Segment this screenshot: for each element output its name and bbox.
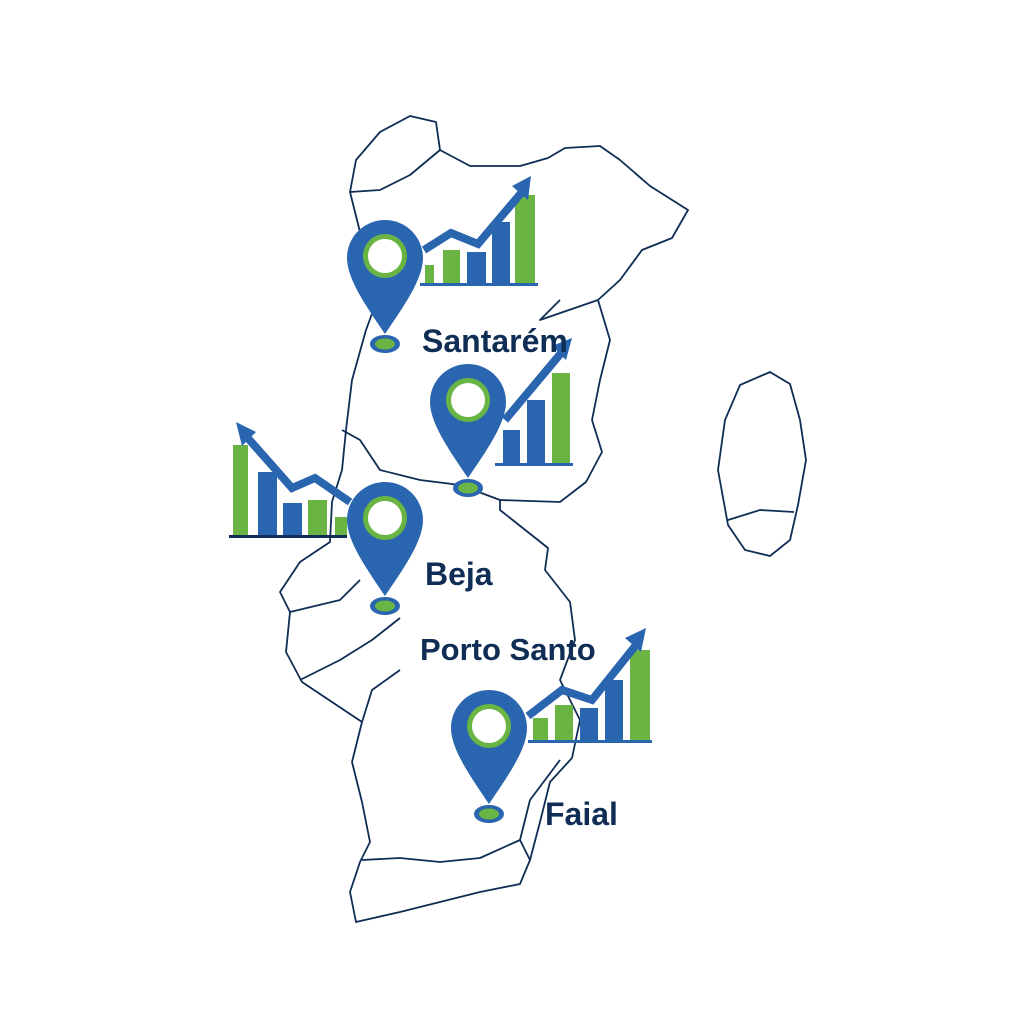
label: Faial: Faial bbox=[545, 796, 618, 832]
chart 3 bbox=[229, 422, 350, 538]
map: mainland outline bbox=[280, 116, 688, 922]
pin 4 bbox=[451, 690, 527, 823]
pin 3 bbox=[347, 482, 423, 615]
label: Porto Santo: Porto Santo bbox=[420, 632, 596, 667]
chart 2 bbox=[495, 338, 573, 466]
pin 1 bbox=[347, 220, 423, 353]
chart 4 bbox=[528, 628, 652, 743]
chart 1 bbox=[420, 176, 538, 286]
label: Beja: Beja bbox=[425, 556, 493, 592]
pin 2 bbox=[430, 364, 506, 497]
label: Santarém: Santarém bbox=[422, 323, 568, 359]
map: island outline bbox=[718, 372, 806, 556]
